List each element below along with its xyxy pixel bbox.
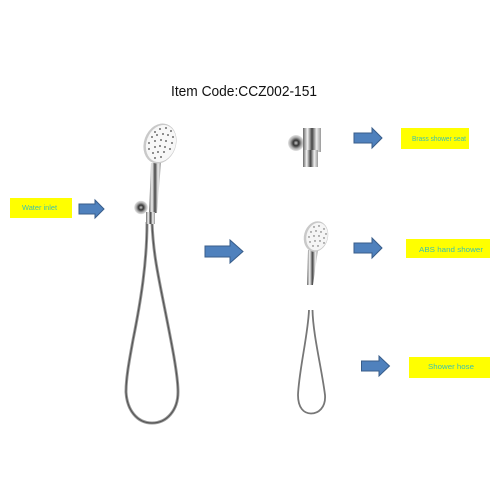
- product: full shower set: [126, 119, 182, 423]
- product: ABS hand shower: [300, 218, 332, 285]
- label: shower hose: Shower hose: [428, 362, 474, 371]
- arrow: main: [205, 240, 243, 263]
- arrow: water inlet: [79, 200, 104, 218]
- arrow: brass shower seat: [354, 128, 382, 148]
- label: brass shower seat: Brass shower seat: [412, 134, 467, 143]
- product: shower hose: [298, 310, 325, 414]
- hand shower head: [138, 119, 182, 168]
- wall mount: [134, 201, 148, 214]
- label: ABS hand shower: ABS hand shower: [419, 245, 484, 254]
- label: shower hose: [409, 357, 490, 378]
- hand shower handle: [149, 163, 161, 213]
- label: water inlet: [10, 198, 72, 218]
- hose: [126, 222, 178, 423]
- label: water inlet: Water inlet: [22, 205, 57, 212]
- arrow: ABS hand shower: [354, 238, 382, 258]
- product: brass shower seat: [288, 128, 321, 167]
- arrow: shower hose: [362, 356, 390, 376]
- title: Item Code:CCZ002-151: [171, 83, 317, 100]
- label: brass shower seat: [401, 128, 469, 149]
- label: ABS hand shower: [406, 239, 490, 258]
